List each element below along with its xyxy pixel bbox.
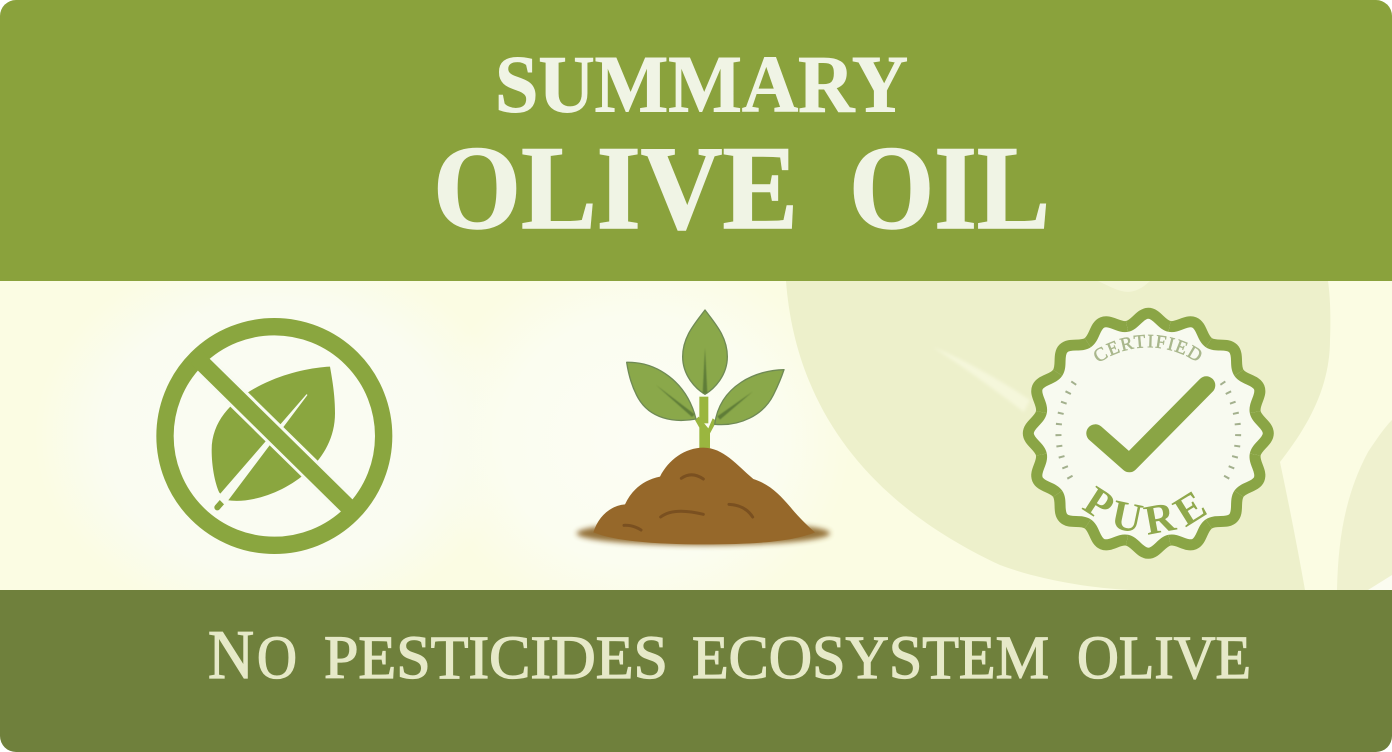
- prohibition bar: [197, 358, 353, 512]
- footer text: PESTICIDES: [324, 625, 668, 692]
- footer text: ECOSYSTEM: [692, 625, 1049, 692]
- badge text: certified: CERTIFIED: [1094, 334, 1202, 361]
- background leaf highlight: [944, 353, 1029, 410]
- badge text: pure: PURE: [1082, 486, 1207, 535]
- badge side ticks: [1058, 382, 1238, 484]
- left leaf: [627, 362, 696, 420]
- badge scalloped border: [1028, 313, 1268, 553]
- leaf vein: [218, 395, 307, 504]
- check mark: [1095, 385, 1206, 463]
- leaf: [212, 367, 335, 501]
- icon: no pesticides leaf: [165, 327, 384, 545]
- stem: [695, 397, 717, 448]
- right leaf: [715, 370, 784, 425]
- title: olive oil: OIL: [849, 121, 1050, 254]
- soil mound: [593, 448, 815, 544]
- top leaf: [683, 310, 727, 394]
- middle panel background: [0, 281, 1392, 590]
- prohibition ring: [165, 327, 384, 545]
- footer band: [0, 590, 1392, 752]
- soil clods: [624, 475, 753, 530]
- icon: seedling in soil: [577, 310, 830, 545]
- background leaf shape: [786, 281, 1330, 590]
- footer text: N: [208, 617, 254, 694]
- title: olive oil: OLIVE: [433, 121, 798, 254]
- icon: certified pure badge: [1022, 308, 1274, 559]
- leaf stem: [217, 499, 225, 507]
- heading: summary: SUMMARY: [495, 38, 908, 130]
- soil shadow: [577, 521, 830, 545]
- footer text: OLIVE: [1077, 625, 1251, 692]
- background right leaf: [1337, 420, 1392, 590]
- footer text: O: [257, 625, 297, 692]
- badge fill: [1028, 313, 1268, 553]
